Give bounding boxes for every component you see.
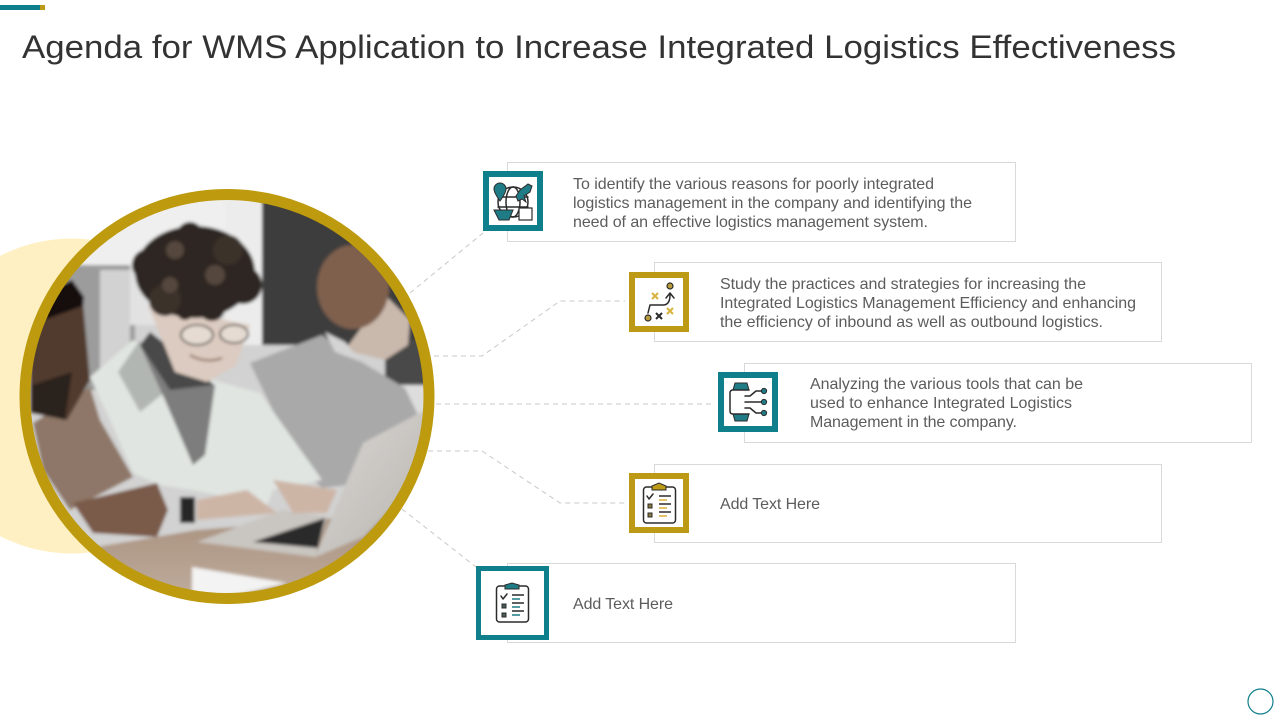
icon: smartwatch network [721,375,775,429]
man at back [250,335,418,488]
laptop base [197,510,327,557]
text: item 2: Integrated Logistics Management Efficiency and enhancing [720,295,1136,312]
table [98,511,386,592]
text: item 3: Analyzing the various tools that can be [810,376,1083,393]
text: item 1: To identify the various reasons for poorly integrated [573,176,934,193]
text: item 2: Study the practices and strategies for increasing the [720,276,1086,293]
circular photo of three colleagues at a laptop [20,190,440,610]
panel: item 2 [654,262,1162,342]
icon: gold clipboard checklist [632,476,686,530]
laptop screen [315,410,430,557]
text: item 5: Add Text Here [573,596,673,613]
man arm [73,483,168,537]
woman jacket [90,340,322,505]
panel: item 1 [508,162,1016,242]
icon: globe logistics [486,174,540,228]
woman face [148,305,250,382]
text: item 2 [720,276,1136,331]
text: item 1: logistics management in the company and identifying the [573,195,972,212]
paper [190,565,286,593]
top accent bar [0,5,45,10]
text: item 3: Management in the company. [810,414,1017,431]
text: item 4: Add Text Here [720,496,820,513]
hands [197,490,277,520]
panel: item 4 [654,464,1162,542]
connector lines [402,233,715,567]
man left [33,387,133,510]
woman hair [135,226,255,318]
text: item 1: need of an effective logistics management system. [573,214,928,231]
text: item 1 [573,176,972,231]
text: item 3 [810,376,1083,431]
panel: item 3 [744,364,1252,442]
page marker circle [1248,689,1273,714]
glasses [181,325,213,345]
icon: strategy play [632,275,686,329]
text: item 2: the efficiency of inbound as well as outbound logistics. [720,314,1103,331]
pale yellow background circle [0,238,230,554]
icon: teal clipboard checklist [478,568,546,638]
text: item 3: used to enhance Integrated Logistics [810,395,1072,412]
title: Agenda for WMS Application to Increase Integrated Logistics Effectiveness [22,29,1176,65]
panel: item 5 [508,564,1016,642]
